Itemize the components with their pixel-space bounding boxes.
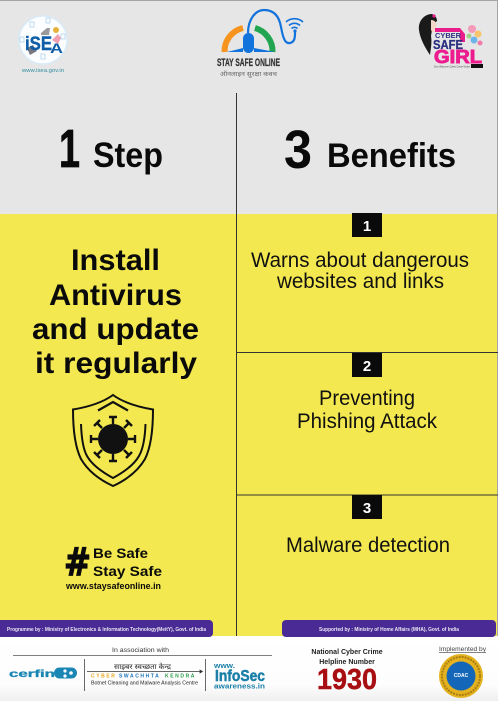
logo: ISEA — [19, 16, 67, 74]
logo: ISEA: A — [50, 40, 63, 56]
logo: Cyber Safe Girl: GIRL — [434, 47, 482, 67]
benefit 3: Malware detection — [286, 534, 450, 557]
hashtag: Be Safe Stay Safe: # — [64, 540, 91, 584]
logo: Cyber Swachhta Kendra — [87, 662, 202, 686]
hashtag: Be Safe Stay Safe: www.staysafeonline.in — [65, 581, 161, 591]
logo: Cyber Safe Girl: CYBER — [435, 33, 461, 40]
banner: programme by: Programme by : Ministry of Electronics & Information Technology(MeitY), Govt. of India — [7, 627, 207, 633]
logo: Cyber Swachhta Kendra: साइबर स्वच्छता केन्द्र — [114, 662, 171, 671]
benefit 1: Warns about dangerous — [251, 249, 469, 272]
implemented by: C-DAC badge: Implemented by — [439, 646, 487, 653]
heading: 3 Benefits: Benefits — [327, 137, 456, 175]
icon: shield with virus — [73, 395, 153, 486]
step text: install antivirus — [32, 244, 199, 380]
benefit 3: 3 — [363, 500, 371, 517]
logo: InfoSec awareness: awareness.in — [214, 682, 265, 690]
logo: Cyber Safe Girl — [419, 14, 483, 68]
logo: Cyber Swachhta Kendra: KENDRA — [165, 674, 196, 680]
logo: Stay Safe Online — [217, 10, 303, 78]
heading: 1 Step: Step — [93, 136, 163, 175]
logo: cerfin — [9, 668, 77, 680]
helpline: 1930 — [317, 664, 377, 696]
helpline: Helpline Number — [319, 659, 375, 666]
hashtag: Be Safe Stay Safe — [64, 540, 162, 591]
logo: cerfin: cerfin — [9, 669, 55, 680]
logo: InfoSec awareness — [213, 661, 265, 690]
implemented by: C-DAC badge — [439, 646, 487, 698]
heading: 3 Benefits — [284, 120, 456, 180]
benefit 2: Preventing — [319, 387, 415, 410]
heading: 1 Step — [59, 119, 163, 179]
logo: Cyber Safe Girl: SAFE — [433, 37, 463, 52]
association section: In association with — [112, 647, 169, 654]
step text: install antivirus: Install — [71, 244, 160, 277]
logo: ISEA: iSE — [25, 34, 52, 55]
heading: 1 Step: 1 — [59, 119, 80, 179]
hashtag: Be Safe Stay Safe: Be Safe — [93, 545, 148, 561]
benefit 2: 2 — [363, 358, 371, 375]
step text: install antivirus: Antivirus — [49, 279, 182, 312]
logo: InfoSec awareness: www. — [213, 661, 235, 670]
hashtag: Be Safe Stay Safe: Stay Safe — [93, 563, 162, 579]
benefit 2: Phishing Attack — [297, 410, 437, 433]
heading: 3 Benefits: 3 — [284, 120, 312, 180]
benefit 2 — [297, 353, 437, 433]
step text: install antivirus: and update — [32, 313, 199, 346]
association section — [9, 647, 272, 691]
banner: supported by: Supported by : Ministry of Home Affairs (MHA), Govt. of India — [319, 627, 460, 633]
banner: supported by — [282, 620, 496, 637]
logo: Cyber Swachhta Kendra: Botnet Cleaning and Malware Analysis Centre — [91, 680, 198, 686]
logo: Stay Safe Online: ऑनलाइन सुरक्षा कवच — [220, 70, 278, 78]
logo: InfoSec awareness: InfoSec — [215, 668, 265, 685]
logo: Cyber Swachhta Kendra: CYBER — [91, 674, 117, 680]
logo: ISEA: www.isea.gov.in — [21, 68, 64, 74]
benefit 3 — [286, 495, 450, 557]
logo: Cyber Swachhta Kendra: SWACHHTA — [119, 674, 160, 680]
logo: Cyber Safe Girl: Don't Become Cyber Crime Victim — [434, 64, 470, 68]
helpline: National Cyber Crime — [311, 649, 383, 656]
logo: Stay Safe Online: STAY SAFE ONLINE — [217, 57, 280, 69]
helpline — [311, 649, 383, 696]
step text: install antivirus: it regularly — [35, 347, 197, 380]
implemented by: C-DAC badge: CDAC — [454, 673, 469, 679]
benefit 1 — [251, 213, 469, 293]
banner: programme by — [0, 620, 213, 637]
benefit 1: 1 — [363, 218, 371, 235]
benefit 1: websites and links — [276, 270, 444, 293]
